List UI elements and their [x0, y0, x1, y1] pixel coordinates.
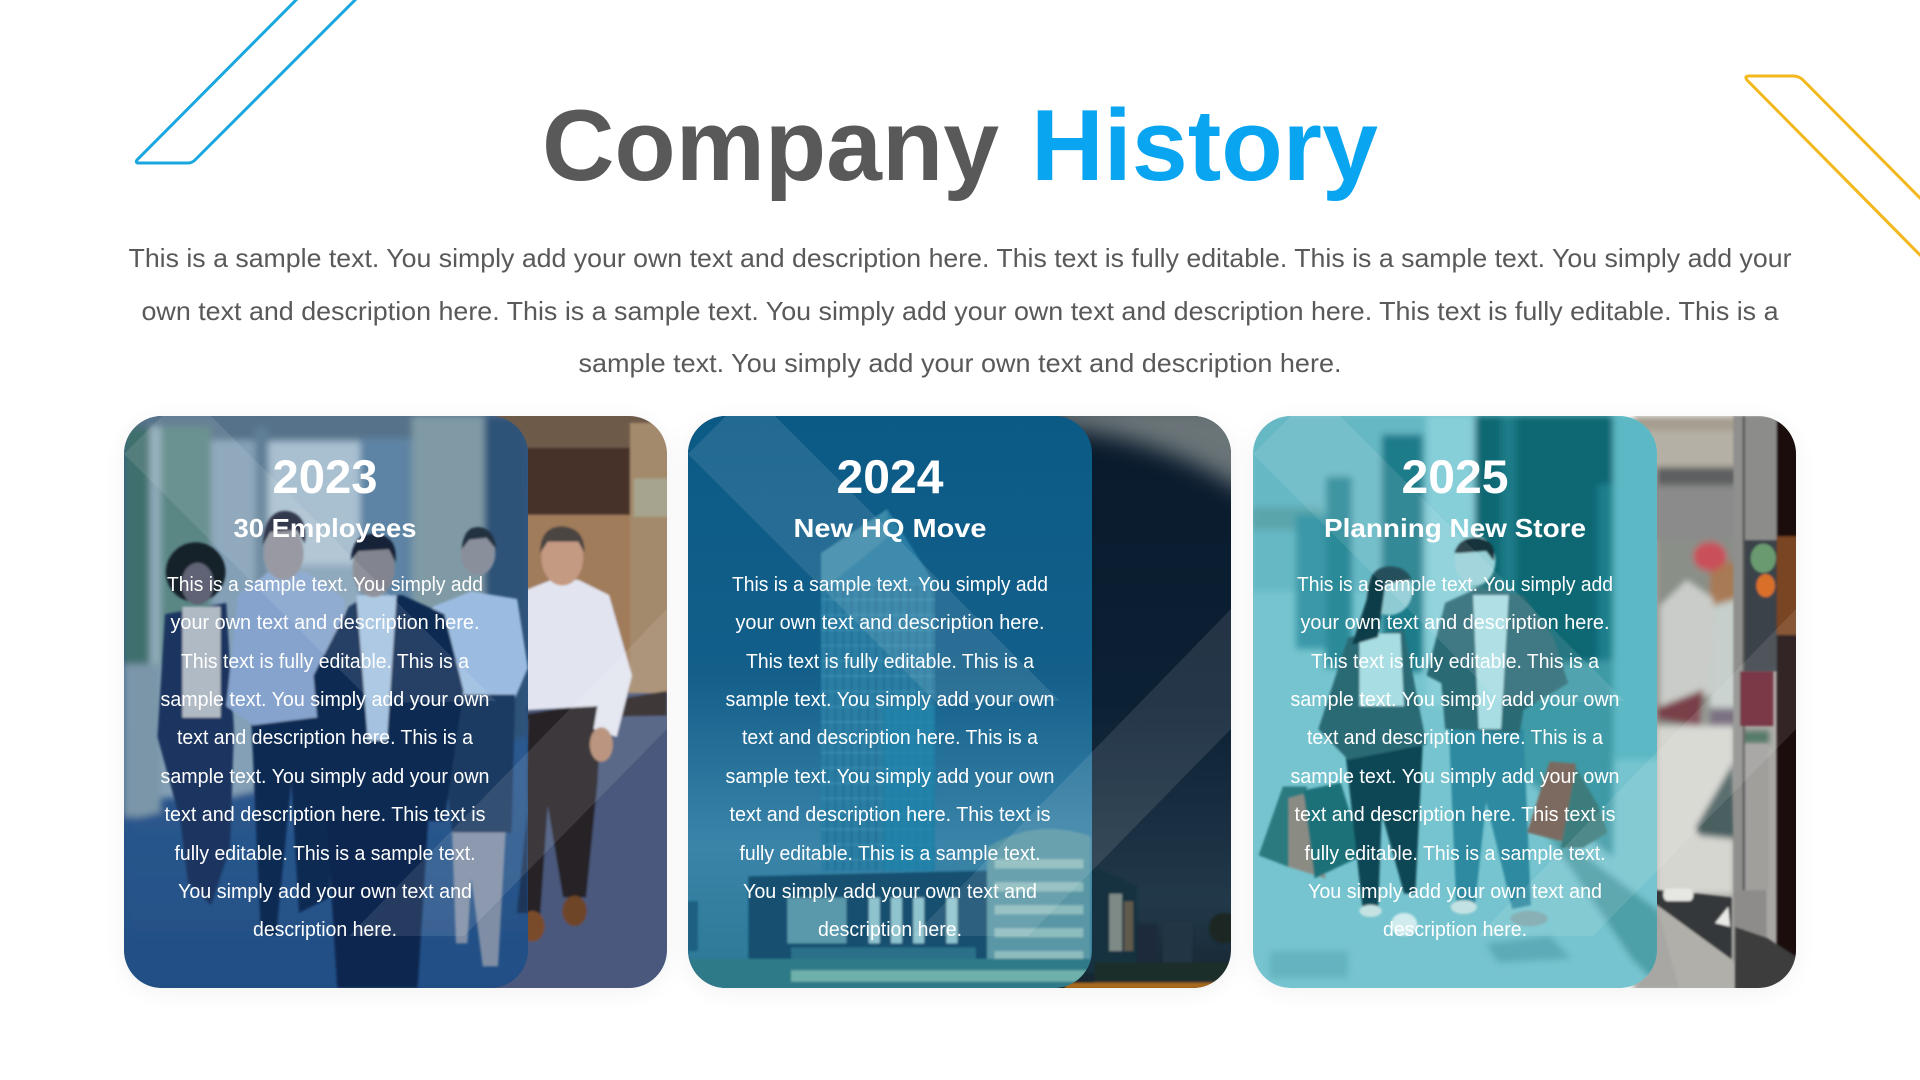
description: sample text. You simply add your own [1290, 688, 1620, 711]
description: sample text. You simply add your own [160, 688, 490, 711]
description: fully editable. This is a sample text. [1304, 842, 1606, 865]
description: description here. [818, 918, 962, 941]
chevron light bands [124, 416, 667, 936]
intro paragraph: This is a sample text. You simply add your own text and description here. This text is fully editable. This is a sample text. You simply add your [128, 243, 1792, 273]
panel: 2023 card [123, 411, 674, 993]
card shadows [124, 420, 1796, 992]
description: This is a sample text. You simply add [732, 573, 1048, 596]
description: sample text. You simply add your own [1290, 765, 1620, 788]
panel: 2025 card [1251, 415, 1803, 992]
description: your own text and description here. [170, 611, 480, 634]
description: sample text. You simply add your own [726, 688, 1054, 711]
chevron light bands [1253, 416, 1796, 936]
title: Company [542, 90, 999, 202]
description: text and description here. This is a [1307, 726, 1604, 749]
description: This is a sample text. You simply add [167, 573, 483, 596]
description: text and description here. This text is [730, 803, 1050, 826]
title: History [1031, 90, 1378, 202]
chevron light bands [688, 416, 1231, 936]
description: This text is fully editable. This is a [1311, 650, 1600, 673]
description: description here. [1383, 918, 1527, 941]
subtitle: New HQ Move [794, 513, 986, 543]
photo inside panel [687, 509, 1094, 989]
intro paragraph: sample text. You simply add your own text and description here. [578, 348, 1342, 378]
decorative yellow outline parallelogram [1746, 76, 1920, 257]
tinted text panel [124, 416, 528, 988]
description [726, 573, 1054, 941]
description: your own text and description here. [736, 611, 1044, 634]
year: 2025 [1402, 450, 1508, 503]
title [542, 90, 1378, 202]
year: 2023 [272, 450, 378, 503]
description: You simply add your own text and [1308, 880, 1602, 903]
description: text and description here. This is a [177, 726, 474, 749]
intro paragraph [128, 243, 1792, 378]
panel: 2024 card [687, 400, 1257, 989]
year: 2024 [836, 450, 944, 503]
description [160, 573, 490, 941]
subtitle: Planning New Store [1324, 513, 1586, 543]
description: You simply add your own text and [178, 880, 472, 903]
description: You simply add your own text and [743, 880, 1037, 903]
description: This is a sample text. You simply add [1297, 573, 1613, 596]
photo: team walking [483, 411, 674, 993]
description: sample text. You simply add your own [160, 765, 490, 788]
tinted text panel [688, 416, 1092, 988]
photo: skyscraper at night [688, 400, 1257, 989]
decorative blue outline parallelogram [136, 0, 357, 163]
description: fully editable. This is a sample text. [174, 842, 476, 865]
photo: shoppers at storefront [1630, 416, 1796, 988]
description: This text is fully editable. This is a [181, 650, 470, 673]
photo inside panel [1251, 415, 1661, 989]
intro paragraph: own text and description here. This is a sample text. You simply add your own text and description here. This text is fully editable. This is a [142, 296, 1779, 326]
description: text and description here. This text is [164, 803, 486, 826]
description: sample text. You simply add your own [726, 765, 1054, 788]
description: description here. [253, 918, 397, 941]
description: text and description here. This is a [742, 726, 1039, 749]
description [1290, 573, 1620, 941]
description: This text is fully editable. This is a [746, 650, 1035, 673]
description: text and description here. This text is [1294, 803, 1616, 826]
tinted text panel [1253, 416, 1657, 988]
description: fully editable. This is a sample text. [740, 842, 1040, 865]
photo inside panel [123, 411, 531, 989]
description: your own text and description here. [1300, 611, 1610, 634]
subtitle: 30 Employees [234, 513, 416, 543]
